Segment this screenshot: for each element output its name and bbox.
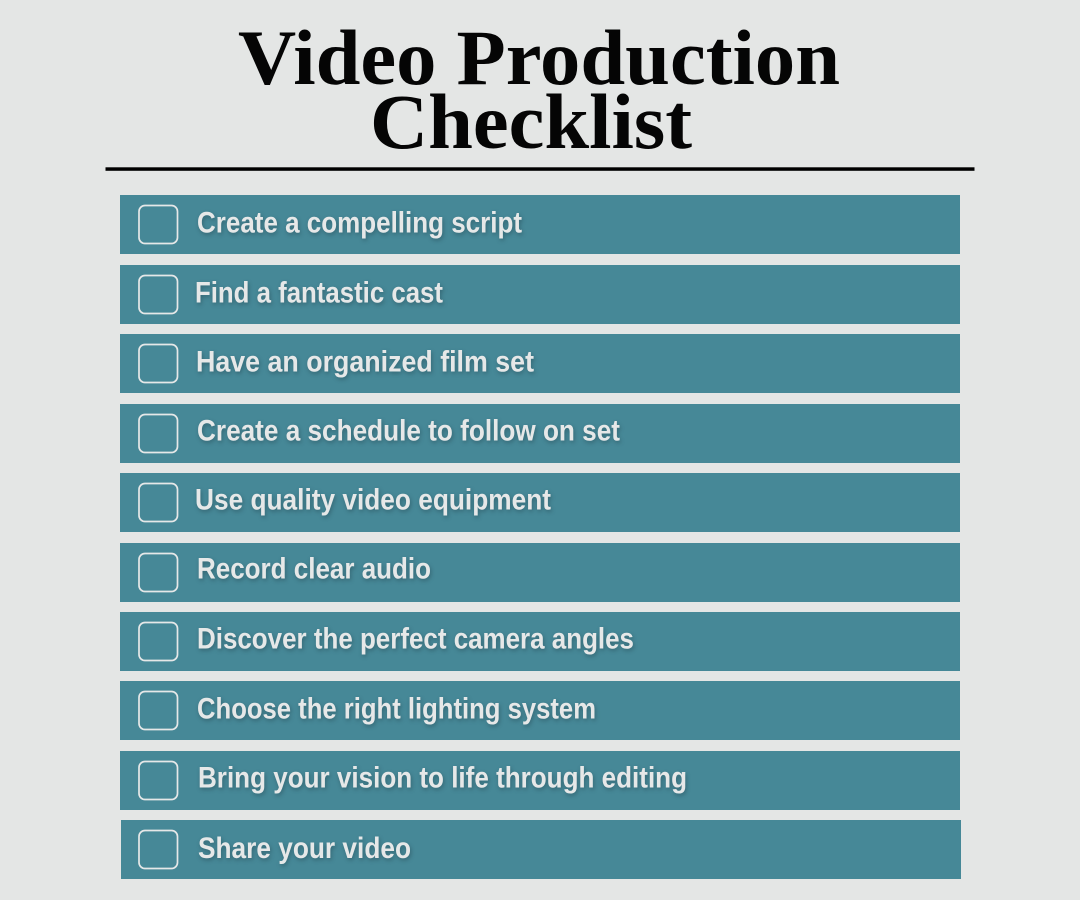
item 9: Bring your vision to life through editing: Bring your vision to life through editing	[198, 762, 687, 794]
item 1: Create a compelling script: Create a compelling script	[197, 206, 522, 240]
item 2: Find a fantastic cast	[120, 265, 960, 324]
item 8: Choose the right lighting system: Choose the right lighting system	[197, 692, 596, 726]
title	[238, 14, 840, 165]
item 5: Use quality video equipment: Use quality video equipment	[195, 484, 551, 516]
checklist	[120, 195, 961, 879]
item 1: Create a compelling script	[120, 195, 960, 254]
item 3: Have an organized film set: Have an organized film set	[196, 346, 534, 378]
item 4: Create a schedule to follow on set: Create a schedule to follow on set	[197, 414, 620, 448]
item 6: Record clear audio: Record clear audio	[197, 552, 431, 586]
item 2: Find a fantastic cast: Find a fantastic cast	[195, 276, 443, 310]
item 3: Have an organized film set	[120, 334, 960, 393]
item 7: Discover the perfect camera angles: Discover the perfect camera angles	[197, 622, 634, 656]
item 10: Share your video	[121, 820, 961, 879]
item 8: Choose the right lighting system	[120, 681, 960, 740]
item 7: Discover the perfect camera angles	[120, 612, 960, 671]
title: Checklist	[370, 78, 692, 165]
item 9: Bring your vision to life through editing	[120, 751, 960, 810]
item 6: Record clear audio	[120, 543, 960, 602]
item 5: Use quality video equipment	[120, 473, 960, 532]
item 10: Share your video: Share your video	[198, 832, 411, 865]
title: Video Production	[238, 14, 840, 101]
item 4: Create a schedule to follow on set	[120, 404, 960, 463]
